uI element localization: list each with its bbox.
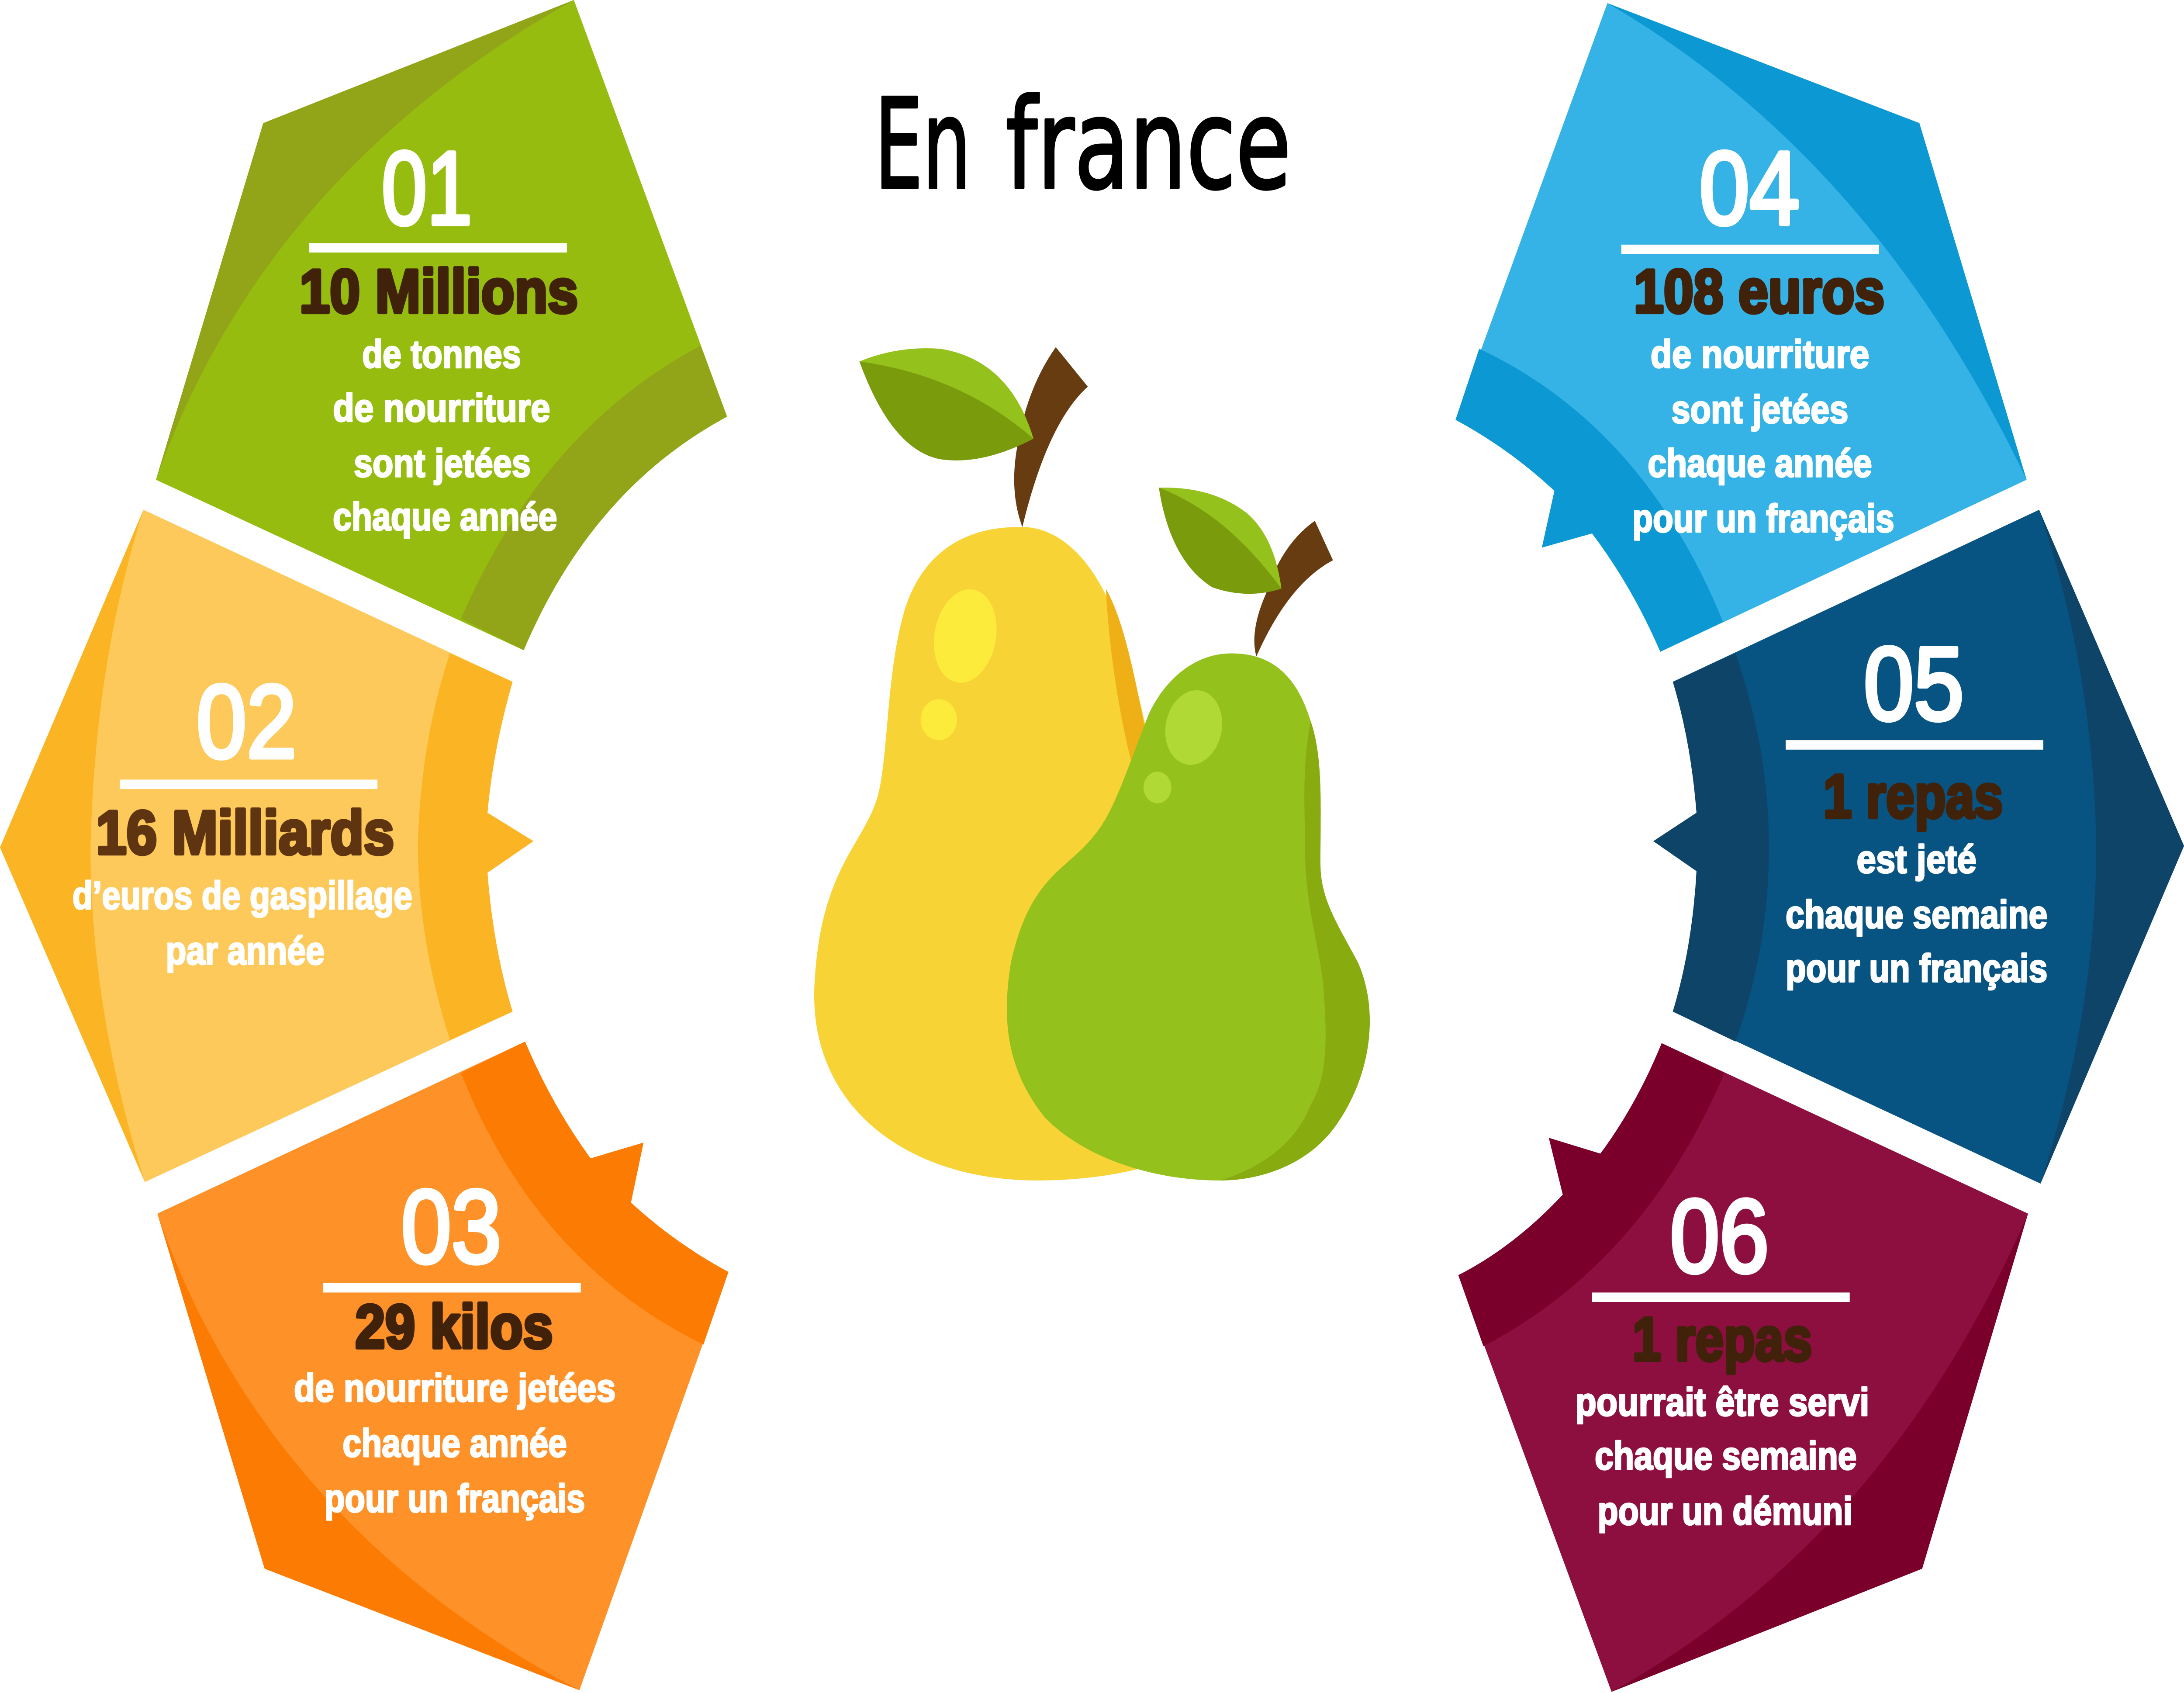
title bbox=[875, 73, 1291, 218]
number 02: 02 bbox=[197, 663, 297, 780]
heading 03: 29 kilos bbox=[355, 1293, 553, 1361]
text 06: chaque semaine bbox=[1595, 1434, 1857, 1478]
text 03: de nourriture jetées bbox=[294, 1366, 615, 1410]
panel: 02 yellow bbox=[0, 510, 533, 1182]
icon: green pear bbox=[1007, 488, 1370, 1181]
rule 03 bbox=[323, 1283, 581, 1292]
body bbox=[1007, 653, 1370, 1181]
text 06 bbox=[1576, 1381, 1869, 1534]
panel: 04 blue bbox=[1455, 3, 2027, 652]
body bbox=[814, 527, 1226, 1181]
heading 01: 10 Millions bbox=[300, 257, 578, 326]
title: En bbox=[875, 73, 971, 218]
text 02: d’euros de gaspillage bbox=[73, 874, 412, 918]
title: france bbox=[1006, 73, 1291, 218]
icon: yellow pear bbox=[814, 347, 1226, 1181]
text 04 bbox=[1632, 332, 1894, 540]
rule 02 bbox=[120, 779, 377, 789]
number 05: 05 bbox=[1864, 625, 1964, 742]
text 03: pour un français bbox=[325, 1477, 585, 1521]
text 06: pourrait être servi bbox=[1576, 1381, 1869, 1424]
stem bbox=[1014, 347, 1088, 527]
stem bbox=[1254, 521, 1333, 657]
text 04: chaque année bbox=[1648, 441, 1872, 485]
text 01: sont jetées bbox=[354, 441, 531, 485]
rule 04 bbox=[1621, 245, 1879, 254]
text 04: pour un français bbox=[1632, 497, 1894, 540]
rule 01 bbox=[309, 243, 567, 253]
text 02 bbox=[73, 874, 412, 973]
text 02: par année bbox=[166, 929, 325, 973]
text 06: pour un démuni bbox=[1598, 1489, 1852, 1534]
text 01: de tonnes bbox=[362, 332, 521, 377]
shade bbox=[1220, 721, 1370, 1181]
text 03: chaque année bbox=[342, 1421, 567, 1465]
text 05 bbox=[1786, 838, 2048, 990]
heading 04: 108 euros bbox=[1634, 257, 1884, 326]
highlights bbox=[1144, 682, 1230, 803]
panel: 01 green bbox=[156, 0, 727, 650]
number 06: 06 bbox=[1670, 1177, 1769, 1294]
text 05: pour un français bbox=[1786, 946, 2048, 990]
panel: 05 dark blue bbox=[1653, 510, 2184, 1184]
text 04: de nourriture bbox=[1651, 332, 1869, 377]
panel: 06 maroon bbox=[1458, 1043, 2028, 1692]
text 05: chaque semaine bbox=[1786, 893, 2048, 937]
text 01: de nourriture bbox=[333, 386, 550, 430]
panel: 03 orange bbox=[157, 1042, 729, 1690]
number 03: 03 bbox=[401, 1168, 501, 1285]
heading 06: 1 repas bbox=[1632, 1305, 1812, 1374]
text 03 bbox=[294, 1366, 615, 1521]
shade bbox=[1106, 589, 1146, 761]
leaf bbox=[859, 348, 1033, 460]
text 05: est jeté bbox=[1857, 838, 1977, 882]
text 01 bbox=[333, 332, 557, 539]
rule 06 bbox=[1592, 1292, 1850, 1302]
heading 05: 1 repas bbox=[1823, 762, 2003, 831]
highlights bbox=[921, 582, 1005, 740]
rule 05 bbox=[1786, 740, 2043, 750]
heading 02: 16 Milliards bbox=[96, 799, 394, 867]
text 04: sont jetées bbox=[1672, 388, 1849, 432]
number 04: 04 bbox=[1699, 130, 1800, 246]
number 01: 01 bbox=[382, 130, 472, 246]
text 01: chaque année bbox=[333, 495, 557, 539]
leaf bbox=[1159, 488, 1282, 594]
